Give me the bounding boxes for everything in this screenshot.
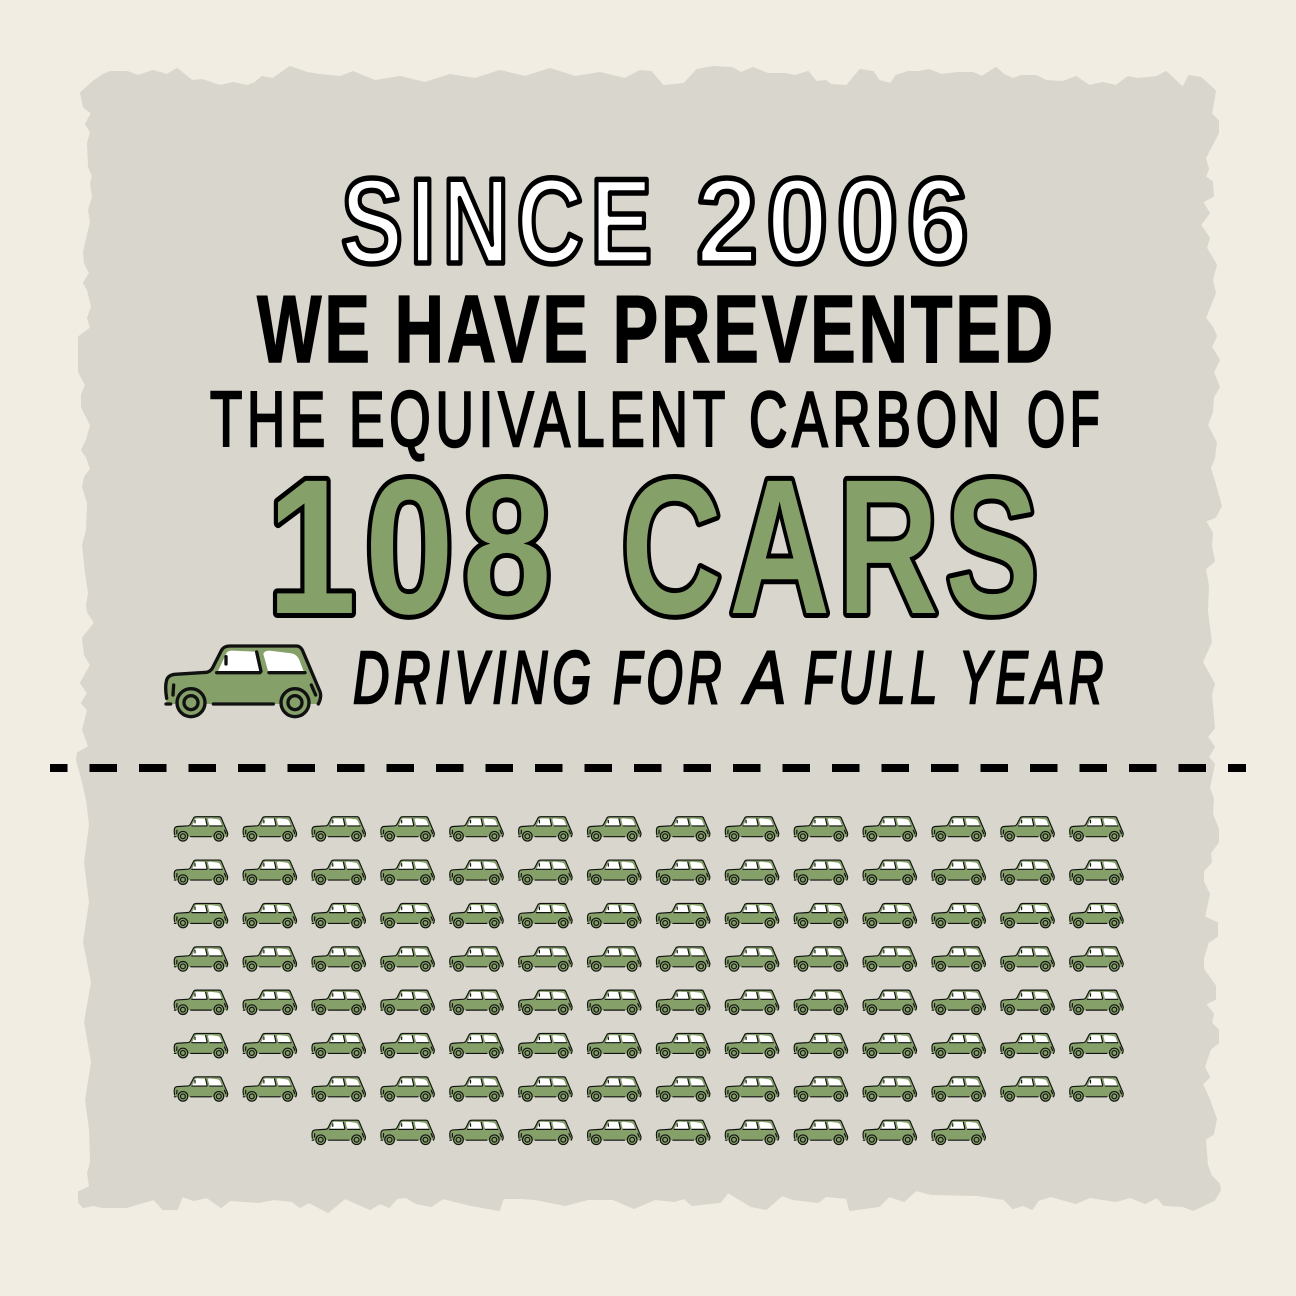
heading: since 2006 (341, 153, 977, 289)
panel: torn paper (77, 67, 1221, 1212)
heading: driving for a full year: FULL (804, 636, 942, 719)
heading: driving for a full year: FOR (613, 636, 726, 719)
row 8 of cars (312, 1120, 985, 1145)
row 3 of cars (174, 903, 1123, 928)
chart: grid of 108 cars (174, 817, 1123, 1145)
heading: 108 cars (267, 439, 1046, 654)
row 5 of cars (174, 990, 1123, 1014)
row 2 of cars (174, 860, 1123, 884)
heading: driving for a full year: DRIVING (353, 636, 596, 719)
heading: the equivalent carbon of: THE (210, 375, 330, 463)
heading: 108 cars: CARS (621, 439, 1046, 654)
heading: the equivalent carbon of: CARBON (749, 375, 1005, 463)
row 1 of cars (174, 817, 1123, 841)
heading: driving for a full year: A (742, 636, 792, 719)
icon: large green car (166, 646, 321, 717)
heading: driving for a full year (353, 636, 1108, 719)
heading: since 2006: 2006 (696, 153, 977, 289)
heading: the equivalent carbon of: EQUIVALENT (349, 375, 730, 463)
heading: 108 cars: 108 (267, 439, 560, 654)
heading: the equivalent carbon of: OF (1027, 375, 1104, 463)
row 4 of cars (174, 947, 1123, 971)
heading: the equivalent carbon of (210, 375, 1104, 463)
row 6 of cars (174, 1033, 1123, 1058)
heading: driving for a full year: YEAR (959, 636, 1108, 719)
row 7 of cars (174, 1077, 1123, 1101)
heading: since 2006: SINCE (341, 153, 659, 289)
